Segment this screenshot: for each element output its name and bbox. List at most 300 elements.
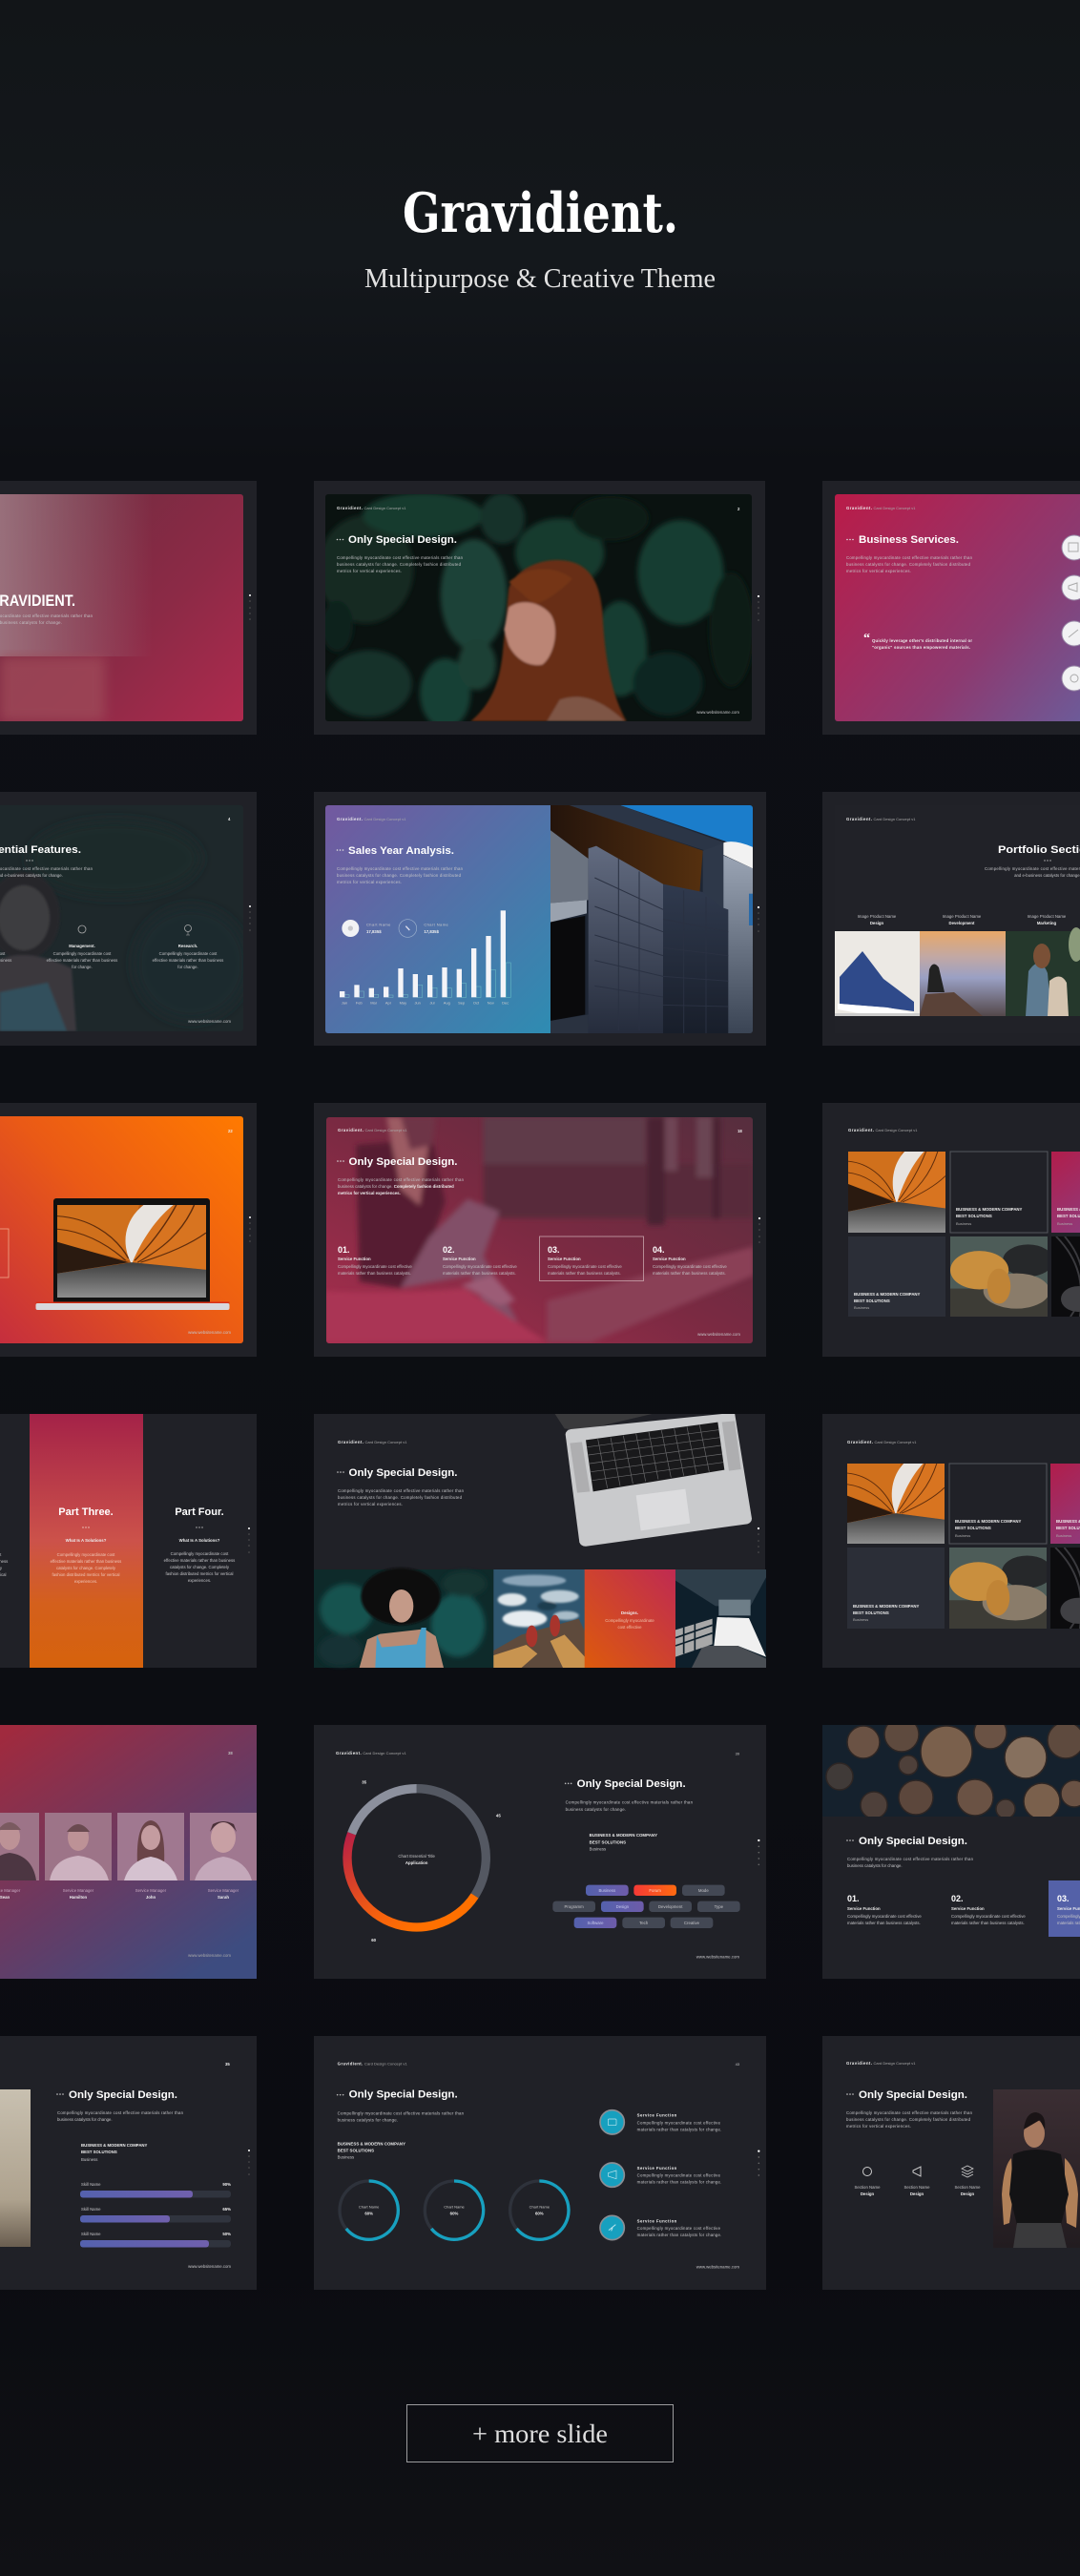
photo: seated woman with red tint [324, 1116, 754, 1345]
body text: business catalysts for change. Completely fashion distributed [338, 1184, 454, 1189]
photo: dim woman on leaves [0, 805, 248, 1031]
portrait: John [117, 1813, 184, 1880]
body text [337, 555, 464, 573]
website: www.websitename.com [188, 1953, 231, 1958]
month labels: Mar [370, 1000, 378, 1005]
logo line [338, 1128, 407, 1132]
service 01: materials rather than business catalysts. [338, 1271, 411, 1276]
company text [338, 2141, 405, 2160]
pager dots [758, 1217, 760, 1243]
body text [337, 866, 464, 884]
subtitle: Multipurpose & Creative Theme [364, 264, 716, 294]
service 03 highlighted: materials rather than business catalysts. [548, 1271, 621, 1276]
photo: man in black vest [993, 2089, 1080, 2248]
product labels [858, 914, 1067, 925]
company text: BUSINESS & MODERN COMPANY [81, 2143, 148, 2148]
section: second [904, 2167, 930, 2196]
panel: right slide, sections and man photo [822, 2036, 1080, 2290]
body text: metrics for vertical experiences. [338, 1502, 403, 1506]
team labels: Sarah [218, 1895, 229, 1900]
ring chart one [340, 2181, 398, 2239]
month labels: Jul [429, 1000, 435, 1005]
tile: dog [950, 1236, 1048, 1317]
section: first [855, 2168, 881, 2196]
logo line: Card Design Concept v1 [364, 2062, 407, 2067]
orange gradient background [0, 1116, 243, 1343]
tag chips: Design [616, 1904, 630, 1909]
service 04: materials rather than business catalysts. [653, 1271, 726, 1276]
service 02 [951, 1894, 1026, 1925]
service 03 highlighted: 03. [548, 1245, 560, 1255]
service 02: 02. [951, 1894, 964, 1903]
quote: “ [863, 632, 870, 646]
body text: Compellingly myocardinate cost effective materials rather than [847, 1857, 974, 1861]
heading: Only Special Design. [348, 534, 457, 546]
logo line: Gravidient. [338, 2062, 363, 2067]
ring chart three: 60% [535, 2212, 544, 2216]
heading dots [1044, 860, 1051, 862]
panel: middle slide, donut and tags [314, 1725, 766, 1979]
pager dots [758, 595, 759, 621]
skill bar three: Skill Name [81, 2232, 101, 2236]
body text: Compellingly myocardinate cost effective materials rather than [57, 2110, 184, 2115]
tile: pink business [1051, 1152, 1080, 1233]
logo line [338, 2062, 407, 2067]
body text [57, 2110, 184, 2122]
photo: sepia wall [0, 2089, 31, 2247]
panel: middle slide, laptop and photo strip [314, 1413, 766, 1668]
heading: Only Special Design. [349, 1467, 458, 1479]
body text [338, 2110, 465, 2123]
logo line [336, 1751, 406, 1755]
heading: Only Special Design. [349, 2089, 458, 2101]
section: first: Design [861, 2192, 875, 2196]
pager dots [249, 594, 251, 620]
panel: left slide, Gravidient cover [0, 481, 257, 735]
heading: Only Special Design. [859, 1836, 967, 1847]
body text: Compellingly myocardinate cost effective materials rather than [338, 2110, 465, 2115]
body text: Compellingly myocardinate cost effective materials rather than [338, 1177, 465, 1182]
website: www.websitename.com [696, 1955, 739, 1960]
service 04: Service Function [653, 1257, 686, 1261]
panel: middle slide, Sales Year Analysis [314, 792, 766, 1046]
tile: slate business: BUSINESS & MODERN COMPANY [854, 1292, 921, 1297]
page number: 18 [737, 1129, 742, 1133]
panel: right slide, Business Services [822, 481, 1080, 735]
solid bars [340, 910, 506, 997]
body text: metrics for vertical experiences. [338, 1191, 401, 1195]
chart stats: 17,835$ [366, 929, 382, 934]
service three: materials rather than catalysts for change. [637, 2233, 721, 2237]
quote: Quickly leverage other's distributed internal or [872, 638, 972, 643]
product labels: Design [870, 921, 884, 925]
month labels: Dec [502, 1000, 509, 1005]
tile: dark abstract [1051, 1236, 1080, 1317]
team labels: Service Manager [135, 1888, 167, 1893]
more slides button [406, 2404, 674, 2462]
pager dots [249, 1216, 251, 1242]
pager dots [248, 2150, 250, 2175]
skill bar two: 65% [222, 2207, 231, 2212]
tag chips: Software [587, 1921, 604, 1925]
company text: Business [81, 2157, 97, 2162]
photo: blue shoe [835, 931, 920, 1016]
tile: pink business: Business [1056, 1533, 1071, 1538]
service 03 highlighted [540, 1236, 643, 1280]
tag chips: Creative [684, 1921, 700, 1925]
ring chart one: 60% [364, 2212, 373, 2216]
tile: slate business [848, 1236, 945, 1317]
feature: Management: for change. [72, 965, 93, 969]
page number: 39 [736, 1751, 740, 1755]
month labels: Oct [473, 1000, 480, 1005]
service 03 highlighted: 03. [1057, 1894, 1070, 1903]
tile: outlined business [950, 1152, 1048, 1233]
tag chips: Forum [649, 1888, 661, 1893]
month labels: May [400, 1000, 406, 1005]
pager dots [758, 906, 759, 932]
logo line: Card Design Concept v1 [364, 817, 406, 821]
website: www.websitename.com [697, 1332, 740, 1337]
service 02: Compellingly myocardinate cost effective [951, 1914, 1026, 1919]
intro text [0, 866, 93, 878]
page number: 35 [225, 2062, 230, 2067]
tile: slate business: BUSINESS & MODERN COMPANY [853, 1604, 920, 1609]
service 03 highlighted: Compellingly myocardinate cost effective [548, 1264, 622, 1269]
logo line: Card Design Concept v1 [364, 506, 406, 510]
intro text: and e-business catalysts for change. [1014, 873, 1080, 878]
month labels: Feb [356, 1000, 363, 1005]
pager dots [758, 1527, 759, 1553]
part three column: What Is A Solutions? [66, 1538, 107, 1543]
skill bar two [80, 2207, 231, 2223]
tile: outlined business: Business [955, 1533, 970, 1538]
product labels: Image Product Name [1028, 914, 1067, 919]
body text: business catalysts for change. Completely fashion distributed [846, 2117, 971, 2122]
team labels: John [146, 1895, 156, 1900]
tag chips: Programm [565, 1904, 584, 1909]
logo line: Card Design Concept v1 [874, 2061, 916, 2066]
service 02 [443, 1245, 517, 1276]
company text: Business [590, 1846, 606, 1851]
company text: BEST SOLUTIONS [590, 1839, 626, 1844]
tile: slate business: Business [853, 1617, 868, 1622]
service 02: Service Function [951, 1906, 985, 1911]
company text: BUSINESS & MODERN COMPANY [590, 1833, 657, 1838]
chart stats: 17,835$ [424, 929, 440, 934]
tile: dark abstract [1050, 1548, 1080, 1629]
body text [338, 1488, 465, 1506]
section: second: Section Name [904, 2185, 930, 2190]
part three column: experiences. [74, 1579, 97, 1584]
part three column: Compellingly myocardinate cost [57, 1552, 115, 1557]
service 03 highlighted: Service Function [548, 1257, 581, 1261]
month labels: Apr [385, 1000, 392, 1005]
tile: tunnel [847, 1464, 945, 1544]
service 02: materials rather than business catalysts. [443, 1271, 516, 1276]
website: www.websitename.com [696, 710, 739, 715]
title: Gravidient. [403, 181, 678, 245]
team labels: Hamilton [70, 1895, 88, 1900]
skill bar one [80, 2182, 231, 2198]
service 04 [653, 1245, 727, 1276]
pager dots [249, 905, 251, 931]
tile: outlined business: BEST SOLUTIONS [956, 1214, 992, 1218]
feature: Research: Research. [178, 944, 197, 948]
logo line: Gravidient. [337, 506, 363, 510]
donut values: 35 [362, 1780, 367, 1785]
skill bar two: Skill Name [81, 2207, 101, 2212]
body text [846, 555, 973, 573]
tile: outlined business: BEST SOLUTIONS [955, 1526, 991, 1530]
donut centre label: Application [405, 1860, 428, 1865]
ring chart one: Chart Name [359, 2205, 380, 2210]
tag chips: Type [715, 1904, 724, 1909]
service 01: Compellingly myocardinate cost effective [847, 1914, 922, 1919]
service two [600, 2163, 721, 2187]
donut centre label: Chart Essential Title [398, 1854, 435, 1859]
chart stats: Chart Name [366, 923, 391, 927]
logo line [848, 1128, 918, 1132]
laptop [36, 1198, 229, 1310]
cover gradient image [0, 494, 243, 721]
panel: left slide, parts [0, 1414, 257, 1668]
panel: left slide, team [0, 1725, 257, 1979]
month labels: Aug [444, 1000, 450, 1005]
service 01 [338, 1245, 412, 1276]
tile: Designs: Designs. [621, 1610, 638, 1615]
feature: Essential [0, 951, 11, 963]
feature: Research [153, 925, 223, 969]
tile: outlined business [949, 1464, 1047, 1544]
service 01: materials rather than business catalysts. [847, 1921, 921, 1925]
photo: couple [1006, 927, 1080, 1016]
service 01: Compellingly myocardinate cost effective [338, 1264, 412, 1269]
logo line: Card Design Concept v1 [874, 506, 916, 510]
month labels: Nov [488, 1000, 494, 1005]
tile: Designs: Compellingly myocardinate [605, 1618, 654, 1623]
body text: business catalysts for change. [338, 2118, 398, 2123]
feature: Research: effective materials rather than business [153, 958, 223, 963]
service 01: 01. [847, 1894, 860, 1903]
outlined bars [344, 963, 510, 997]
panel: middle slide, woman among leaves [314, 481, 765, 735]
product labels: Marketing [1037, 921, 1057, 925]
company text: Business [338, 2155, 354, 2160]
service one: materials rather than catalysts for change. [637, 2127, 721, 2131]
feature: Management [47, 925, 117, 969]
feature: Management: effective materials rather than business [47, 958, 117, 963]
panel: left slide, orange laptop [0, 1103, 257, 1357]
page number: 4 [228, 817, 231, 821]
tile: pink business: Business [1057, 1221, 1072, 1226]
part three column: Part Three. [58, 1506, 114, 1518]
service one: Compellingly myocardinate cost effective [637, 2120, 721, 2125]
outlined box [0, 1229, 9, 1278]
logo line: Card Design Concept v1 [364, 1440, 407, 1444]
tag chips: Mode [698, 1888, 709, 1893]
tile: tunnel [848, 1152, 945, 1233]
heading: Only Special Design. [859, 2089, 967, 2101]
pager dots [758, 1839, 759, 1865]
service 04: Compellingly myocardinate cost effective [653, 1264, 727, 1269]
logo line [846, 817, 916, 821]
tag chips: Business [599, 1888, 615, 1893]
service one: Service Function [637, 2113, 677, 2118]
heading: Business Services. [859, 534, 959, 546]
part four column: fashion distributed metrics for vertical [166, 1571, 234, 1576]
part two text [0, 1552, 8, 1577]
logo line: Gravidient. [338, 1128, 363, 1132]
section: third: Design [961, 2192, 975, 2196]
body text: business catalysts for change. Completely fashion distributed [846, 562, 971, 567]
skill bar one: 90% [222, 2182, 231, 2187]
service two: Compellingly myocardinate cost effective [637, 2173, 721, 2178]
tile: outlined business: BUSINESS & MODERN COMPANY [955, 1519, 1022, 1524]
website: www.websitename.com [188, 2264, 231, 2269]
page number: 22 [228, 1129, 233, 1133]
body text [566, 1800, 694, 1812]
service 02: Compellingly myocardinate cost effective [443, 1264, 517, 1269]
inner sheet [835, 805, 1080, 1033]
month labels [342, 1000, 509, 1005]
panel: middle slide, four services on red photo [314, 1103, 766, 1357]
ring chart two: Chart Name [444, 2205, 466, 2210]
month labels: Jan [342, 1000, 347, 1005]
service 02: materials rather than business catalysts. [951, 1921, 1025, 1925]
bar chart [340, 910, 510, 1005]
ring chart two [425, 2181, 484, 2239]
portrait: Sarah [190, 1813, 257, 1880]
feature: Management: Management. [69, 944, 95, 948]
skill bar one: Skill Name [81, 2182, 101, 2187]
tile: slate business: Business [854, 1305, 869, 1310]
donut values: 45 [496, 1814, 501, 1818]
page number: 43 [736, 2062, 740, 2067]
donut values [362, 1780, 501, 1942]
part four column: experiences. [188, 1578, 211, 1583]
logo line [337, 817, 406, 821]
month labels: Jun [414, 1000, 421, 1005]
company text: BEST SOLUTIONS [81, 2150, 117, 2154]
body text [846, 2110, 973, 2129]
page number: 2 [737, 507, 740, 511]
intro text [985, 866, 1080, 878]
body text: business catalysts for change. Completely fashion distributed [338, 1495, 463, 1500]
panel: right slide, image grid [822, 1103, 1080, 1357]
tile: Designs: cost effective [618, 1625, 642, 1630]
portrait: Hamilton [45, 1813, 112, 1880]
service 03 highlighted [1049, 1880, 1080, 1937]
tile: slate business: BEST SOLUTIONS [853, 1610, 889, 1615]
heading dots [26, 860, 33, 862]
part four column [164, 1506, 235, 1583]
body text [847, 1857, 974, 1868]
body text: metrics for vertical experiences. [846, 2124, 911, 2129]
body text: business catalysts for change. [847, 1863, 903, 1868]
logo line: Card Design Concept v1 [363, 1751, 406, 1755]
ring chart three: Chart Name [530, 2205, 550, 2210]
logo line [337, 506, 406, 510]
logo line [338, 1440, 407, 1444]
part three column: catalysts for change. Completely [56, 1566, 116, 1570]
product labels: Image Product Name [943, 914, 982, 919]
chart stats: Chart Name [424, 923, 448, 927]
body text: Compellingly myocardinate cost effective materials rather than [846, 555, 973, 560]
feature: Research: Compellingly myocardinate cost [159, 951, 218, 956]
part four column: catalysts for change. Completely [170, 1565, 230, 1569]
service 02: Service Function [443, 1257, 476, 1261]
part three column [30, 1414, 143, 1668]
laptop illustration [555, 1413, 752, 1547]
logo line: Gravidient. [337, 817, 363, 821]
body text: business catalysts for change. [566, 1807, 626, 1812]
part four column: Part Four. [175, 1506, 224, 1518]
part four column: Compellingly myocardinate cost [171, 1551, 229, 1556]
heading: Only Special Design. [69, 2089, 177, 2101]
section: first: Section Name [855, 2185, 881, 2190]
more slides button: + more slide [472, 2420, 608, 2448]
chart stats [366, 923, 448, 934]
panel: right slide, Portfolio Section [822, 792, 1080, 1046]
product labels: Development [949, 921, 975, 925]
logo line [847, 1440, 917, 1444]
team labels: Service Manager [63, 1888, 94, 1893]
tag chips: Tech [639, 1921, 649, 1925]
photo: clouds at sunset [920, 931, 1006, 1016]
section: second: Design [910, 2192, 924, 2196]
body text [338, 1177, 465, 1195]
tile: dog [949, 1548, 1047, 1629]
company text [81, 2143, 148, 2162]
panel: left slide, skills [0, 2036, 257, 2290]
body text: business catalysts for change. [57, 2117, 113, 2122]
service 04: 04. [653, 1245, 665, 1255]
logo line: Card Design Concept v1 [874, 817, 916, 821]
panel: middle slide, rings and services [314, 2036, 766, 2290]
part four column: What Is A Solutions? [179, 1538, 220, 1543]
service 02: 02. [443, 1245, 455, 1255]
heading: Only Special Design. [577, 1778, 686, 1790]
team labels [0, 1888, 239, 1900]
website: www.websitename.com [696, 2265, 739, 2270]
body text: metrics for vertical experiences. [337, 569, 402, 573]
pager dots [248, 1527, 250, 1553]
logo line [846, 506, 916, 510]
gradient background [835, 494, 1080, 721]
month labels: Sep [458, 1000, 466, 1005]
tile: Designs [585, 1569, 675, 1668]
photo: woman in leaves [314, 1568, 493, 1668]
tile: slate business [847, 1548, 945, 1629]
photo: architecture [675, 1569, 766, 1668]
service three: Compellingly myocardinate cost effective [637, 2226, 721, 2231]
panel: left slide, Essential Features [0, 792, 257, 1046]
ring chart three [510, 2181, 569, 2239]
logo line [846, 2061, 916, 2066]
logo line: Card Design Concept v1 [364, 1128, 407, 1132]
body text: Compellingly myocardinate cost effective materials rather than [566, 1800, 694, 1805]
body text: Compellingly myocardinate cost effective materials rather than [337, 866, 464, 871]
feature: Management: Compellingly myocardinate cost [53, 951, 112, 956]
service one [600, 2110, 721, 2134]
photo: feet over water [493, 1569, 585, 1668]
tile: outlined business: BUSINESS & MODERN COMPANY [956, 1207, 1023, 1212]
product labels: Image Product Name [858, 914, 897, 919]
panel: right slide, logs and services [822, 1716, 1080, 1979]
body text: metrics for vertical experiences. [846, 569, 911, 573]
website: www.websitename.com [188, 1330, 231, 1335]
